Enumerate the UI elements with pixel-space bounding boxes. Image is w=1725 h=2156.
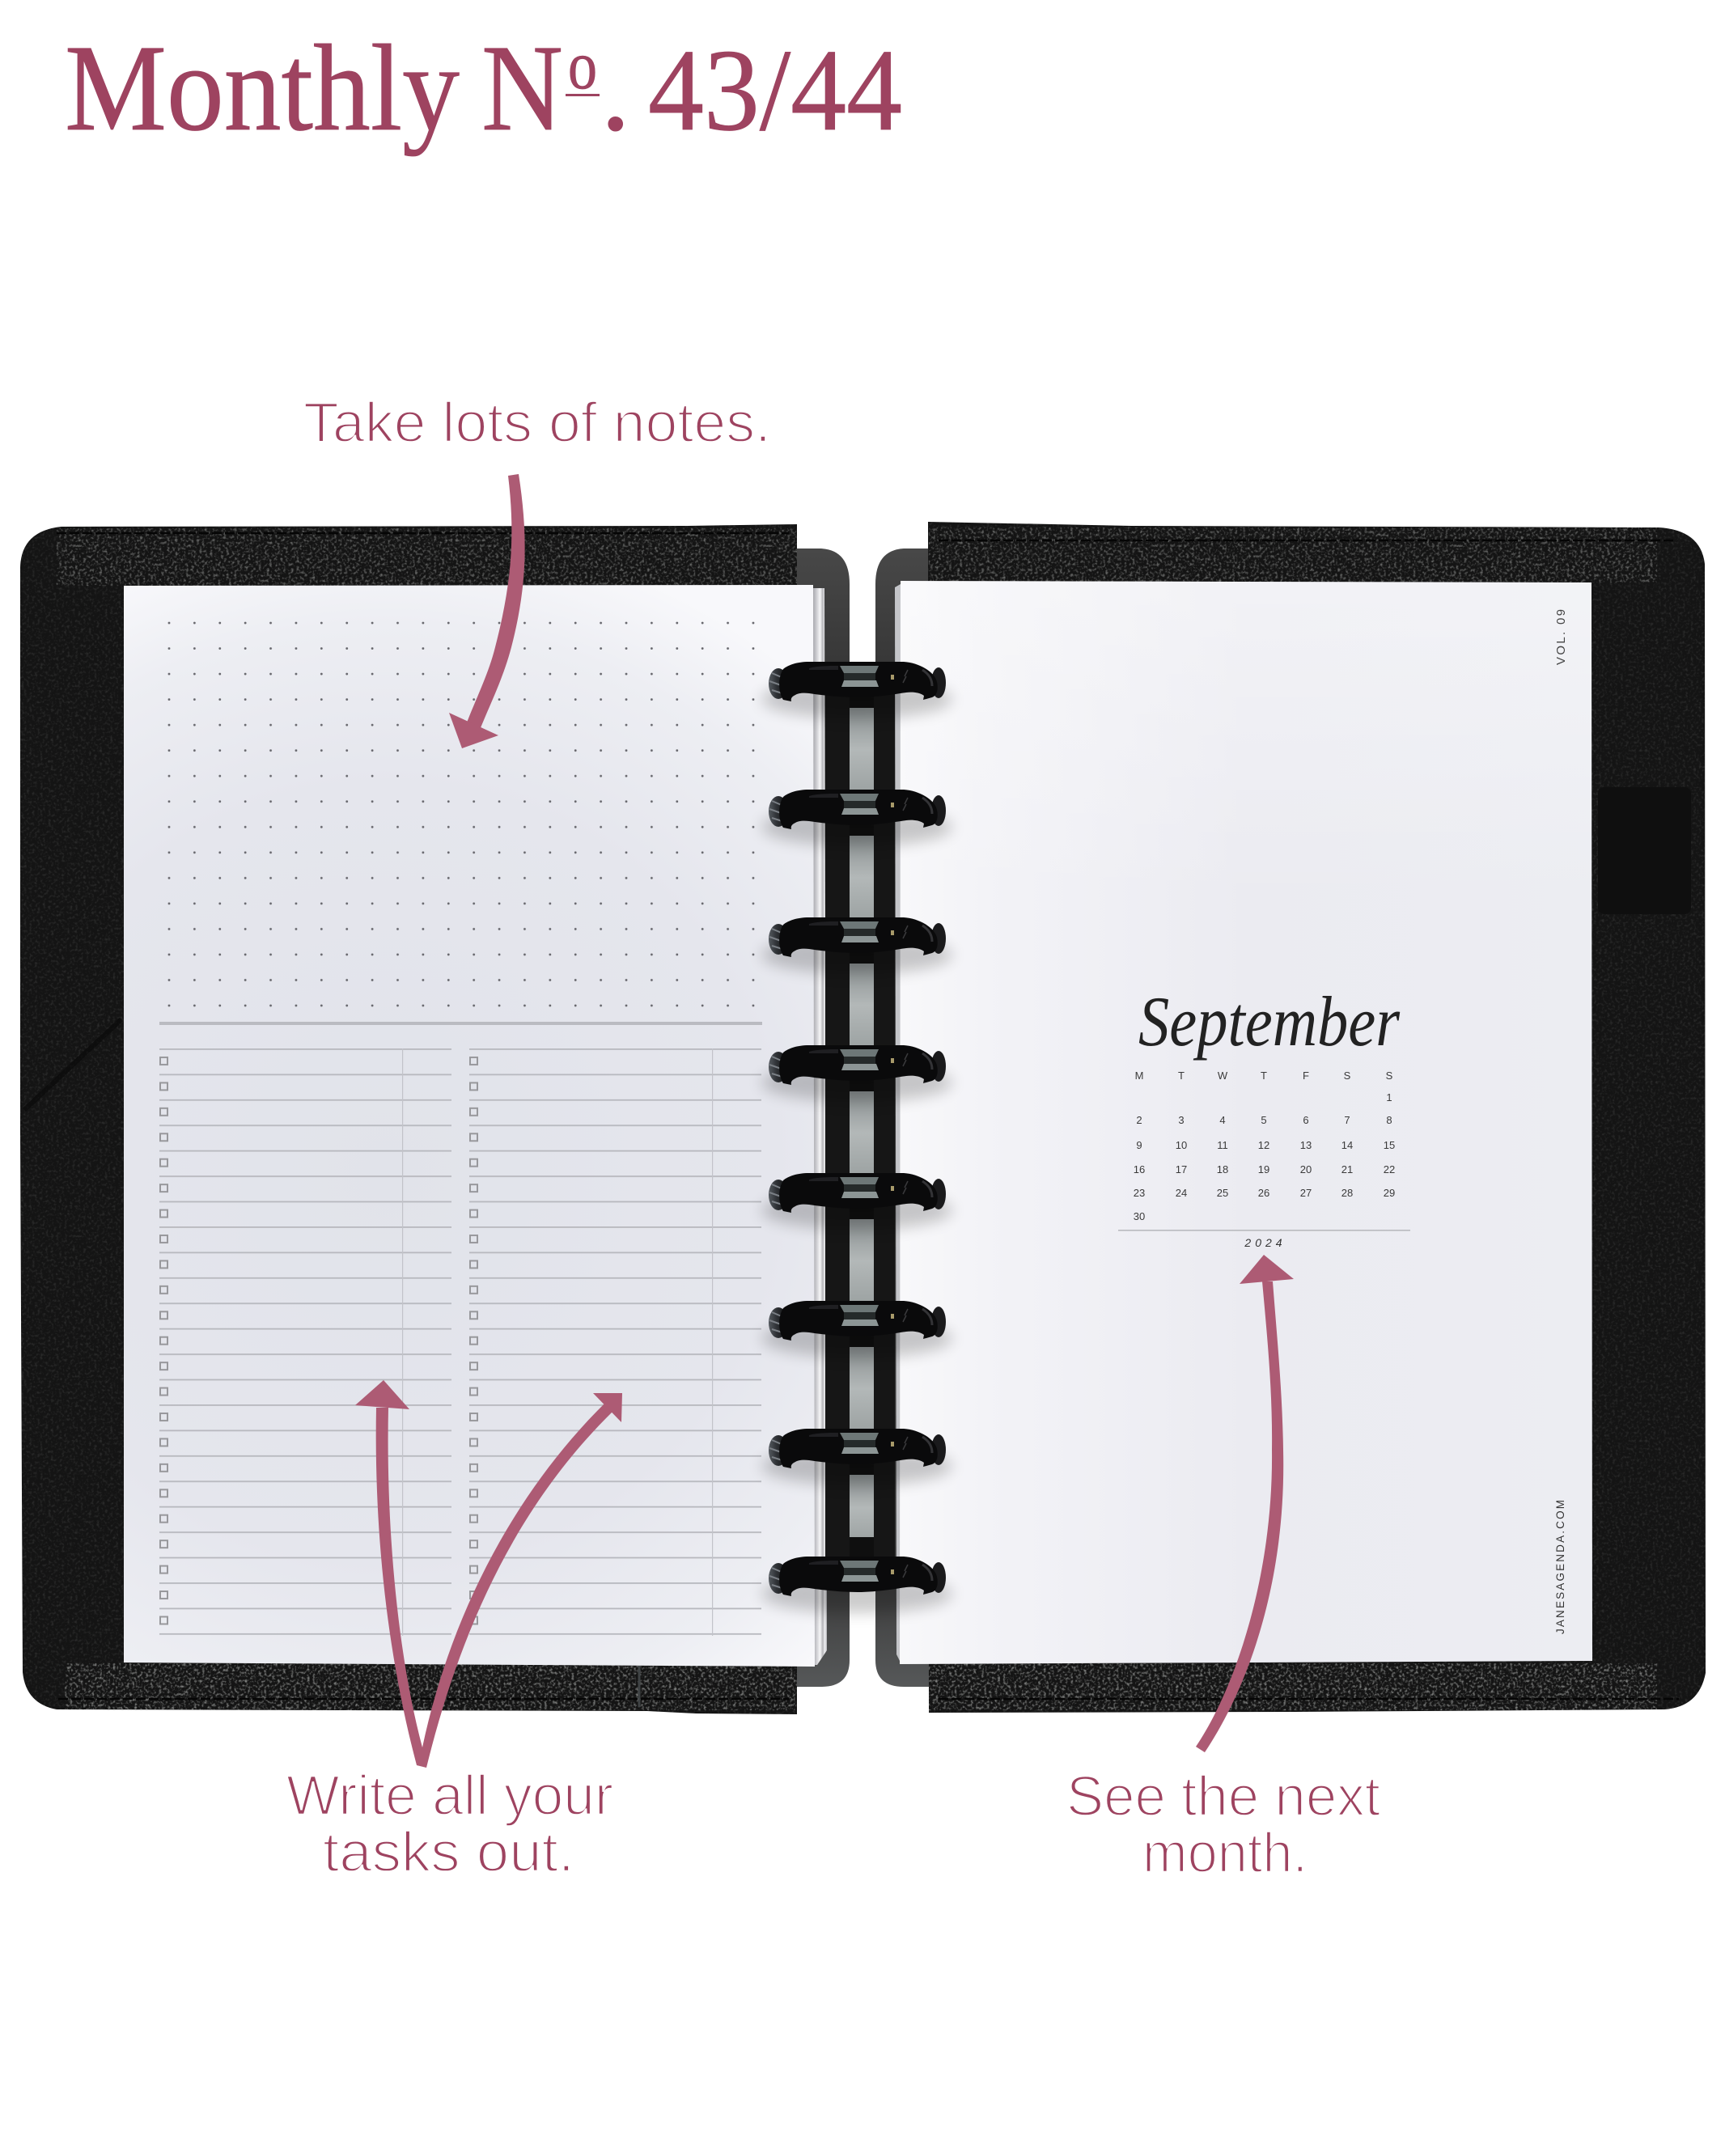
arrows: to task lists	[355, 1380, 622, 1768]
calendar: grid: T	[1261, 1070, 1267, 1082]
website label: JANESAGENDA.COM	[1554, 1500, 1566, 1634]
volume label: VOL. 09	[1554, 609, 1568, 665]
leather grain flap: bottom right	[929, 1663, 1657, 1710]
calendar: grid: 19	[1258, 1163, 1269, 1175]
spine strip: right	[874, 688, 895, 1578]
calendar: grid: 10	[1176, 1139, 1187, 1151]
title: .	[600, 22, 631, 156]
right page	[900, 581, 1592, 1664]
title: 43/44	[648, 26, 902, 155]
label: see the next month: See the next	[1066, 1764, 1380, 1828]
calendar: grid: 28	[1341, 1187, 1353, 1199]
calendar: grid: 8	[1386, 1114, 1392, 1126]
dot grid	[156, 610, 766, 1019]
calendar: grid: 4	[1219, 1114, 1226, 1126]
label: take lots of notes: Take lots of notes.	[303, 391, 771, 454]
calendar: grid: 7	[1344, 1114, 1350, 1126]
calendar: grid: 27	[1300, 1187, 1312, 1199]
planner: right cover	[875, 522, 1706, 1713]
leather grain: right	[928, 522, 1706, 1713]
calendar: year: 2024	[1244, 1236, 1286, 1249]
elastic pen loop	[1598, 787, 1691, 914]
calendar: grid: 16	[1134, 1163, 1145, 1175]
page sheet	[900, 581, 1592, 1664]
label: see the next month: month.	[1142, 1821, 1308, 1884]
leather cover: right	[928, 522, 1706, 1713]
calendar: grid: W	[1218, 1070, 1228, 1082]
leather grain flap: top right	[929, 527, 1657, 582]
calendar: grid: 14	[1341, 1139, 1353, 1151]
label: write all your tasks out: tasks out.	[323, 1820, 574, 1883]
calendar: grid: 12	[1258, 1139, 1269, 1151]
leather cover: left	[20, 524, 797, 1714]
calendar: month name: September	[1138, 983, 1401, 1061]
label: write all your tasks out	[286, 1764, 613, 1883]
stitching: right cover	[939, 540, 1679, 1699]
ring shadows	[761, 680, 952, 1613]
spine connectors	[850, 688, 874, 1569]
calendar: grid: 3	[1178, 1114, 1185, 1126]
calendar: grid: M	[1135, 1070, 1143, 1082]
leather grain flap: top left	[57, 528, 797, 586]
page sheet highlight	[900, 581, 1592, 1664]
leather grain: left	[20, 524, 797, 1714]
page stack: right	[895, 584, 901, 1663]
calendar: grid: 20	[1300, 1163, 1312, 1175]
calendar: grid: F	[1303, 1070, 1309, 1082]
section rule	[159, 1022, 762, 1025]
binder spine	[825, 688, 895, 1578]
leather grain flap: bottom left	[65, 1663, 797, 1710]
calendar: grid: 1	[1386, 1091, 1392, 1103]
calendar: grid: S	[1344, 1070, 1351, 1082]
left page	[124, 585, 815, 1667]
calendar: grid: 30	[1134, 1210, 1145, 1222]
binder tab: left	[789, 549, 850, 1687]
calendar: grid: 29	[1384, 1187, 1395, 1199]
flap seam	[638, 1665, 641, 1707]
calendar: grid: 9	[1136, 1139, 1142, 1151]
arrow: to calendar	[1196, 1255, 1294, 1752]
calendar: grid: 26	[1258, 1187, 1269, 1199]
binder rings	[769, 662, 946, 1596]
page sheet	[124, 585, 815, 1667]
title: N	[481, 20, 563, 157]
calendar: grid: 11	[1217, 1139, 1228, 1151]
pocket seam	[24, 1019, 121, 1110]
task lists with checkboxes	[159, 1048, 763, 1636]
calendar: grid: 15	[1384, 1139, 1395, 1151]
spine gap panels	[850, 708, 874, 1541]
stitching: left cover	[57, 533, 789, 1699]
calendar: grid: 25	[1217, 1187, 1228, 1199]
binder tab: right	[875, 549, 930, 1687]
title	[65, 20, 902, 157]
calendar: rule	[1118, 1230, 1410, 1231]
calendar: grid: 24	[1176, 1187, 1187, 1199]
arrow: to dot grid	[449, 474, 525, 748]
calendar: grid: 5	[1261, 1114, 1267, 1126]
calendar: grid: 17	[1176, 1163, 1187, 1175]
spine strip: left	[825, 688, 850, 1578]
calendar: grid: 6	[1303, 1114, 1309, 1126]
calendar: grid: S	[1386, 1070, 1393, 1082]
calendar: grid: 18	[1217, 1163, 1228, 1175]
calendar: grid: 23	[1134, 1187, 1145, 1199]
label: write all your tasks out: Write all your	[286, 1764, 613, 1827]
page stack: left	[813, 588, 827, 1665]
calendar: grid: 21	[1341, 1163, 1353, 1175]
calendar: grid: 13	[1300, 1139, 1312, 1151]
label: see the next month	[1066, 1764, 1380, 1884]
calendar: grid: 2	[1136, 1114, 1142, 1126]
title: o	[568, 28, 597, 104]
title: Monthly	[65, 20, 460, 157]
calendar: grid	[1134, 1070, 1395, 1222]
calendar: grid: 22	[1384, 1163, 1395, 1175]
calendar: grid: T	[1178, 1070, 1185, 1082]
planner: left cover	[20, 524, 850, 1714]
